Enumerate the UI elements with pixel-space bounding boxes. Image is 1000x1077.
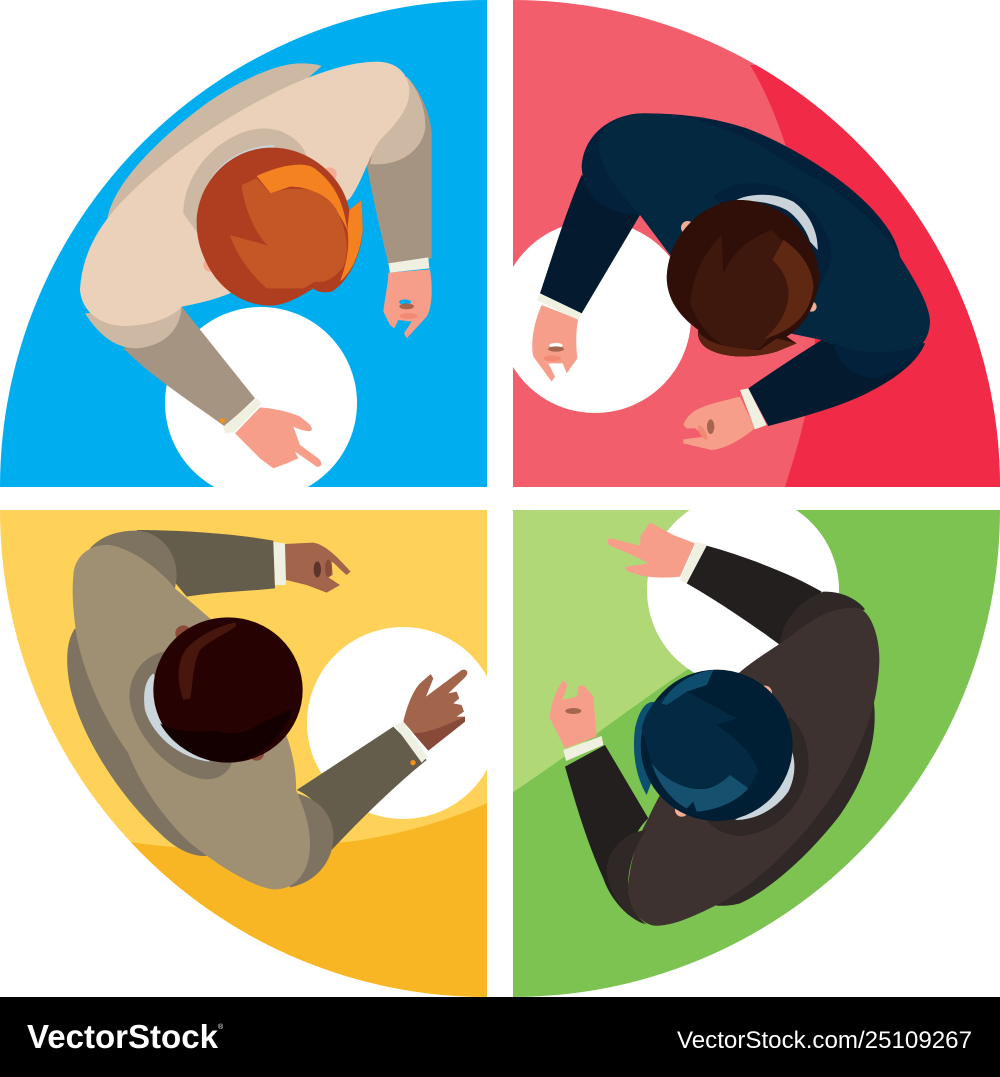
businessman: charcoal suit, blue hair bbox=[550, 522, 879, 926]
businessman: olive suit, dark hair bbox=[67, 530, 467, 889]
image URL text: VectorStock.com/25109267 bbox=[677, 1027, 972, 1054]
registered mark: ® bbox=[218, 1023, 224, 1031]
panel: yellow quadrant bbox=[0, 510, 499, 997]
businessman: beige suit, orange hair bbox=[80, 62, 432, 468]
watermark bar bbox=[0, 997, 1000, 1077]
panel: red quadrant bbox=[499, 0, 1000, 487]
businessman: navy suit, brown hair bbox=[532, 113, 930, 450]
panel: green quadrant bbox=[513, 494, 1000, 997]
logo text: VectorStock bbox=[27, 1018, 219, 1055]
panel: blue quadrant bbox=[0, 0, 487, 499]
